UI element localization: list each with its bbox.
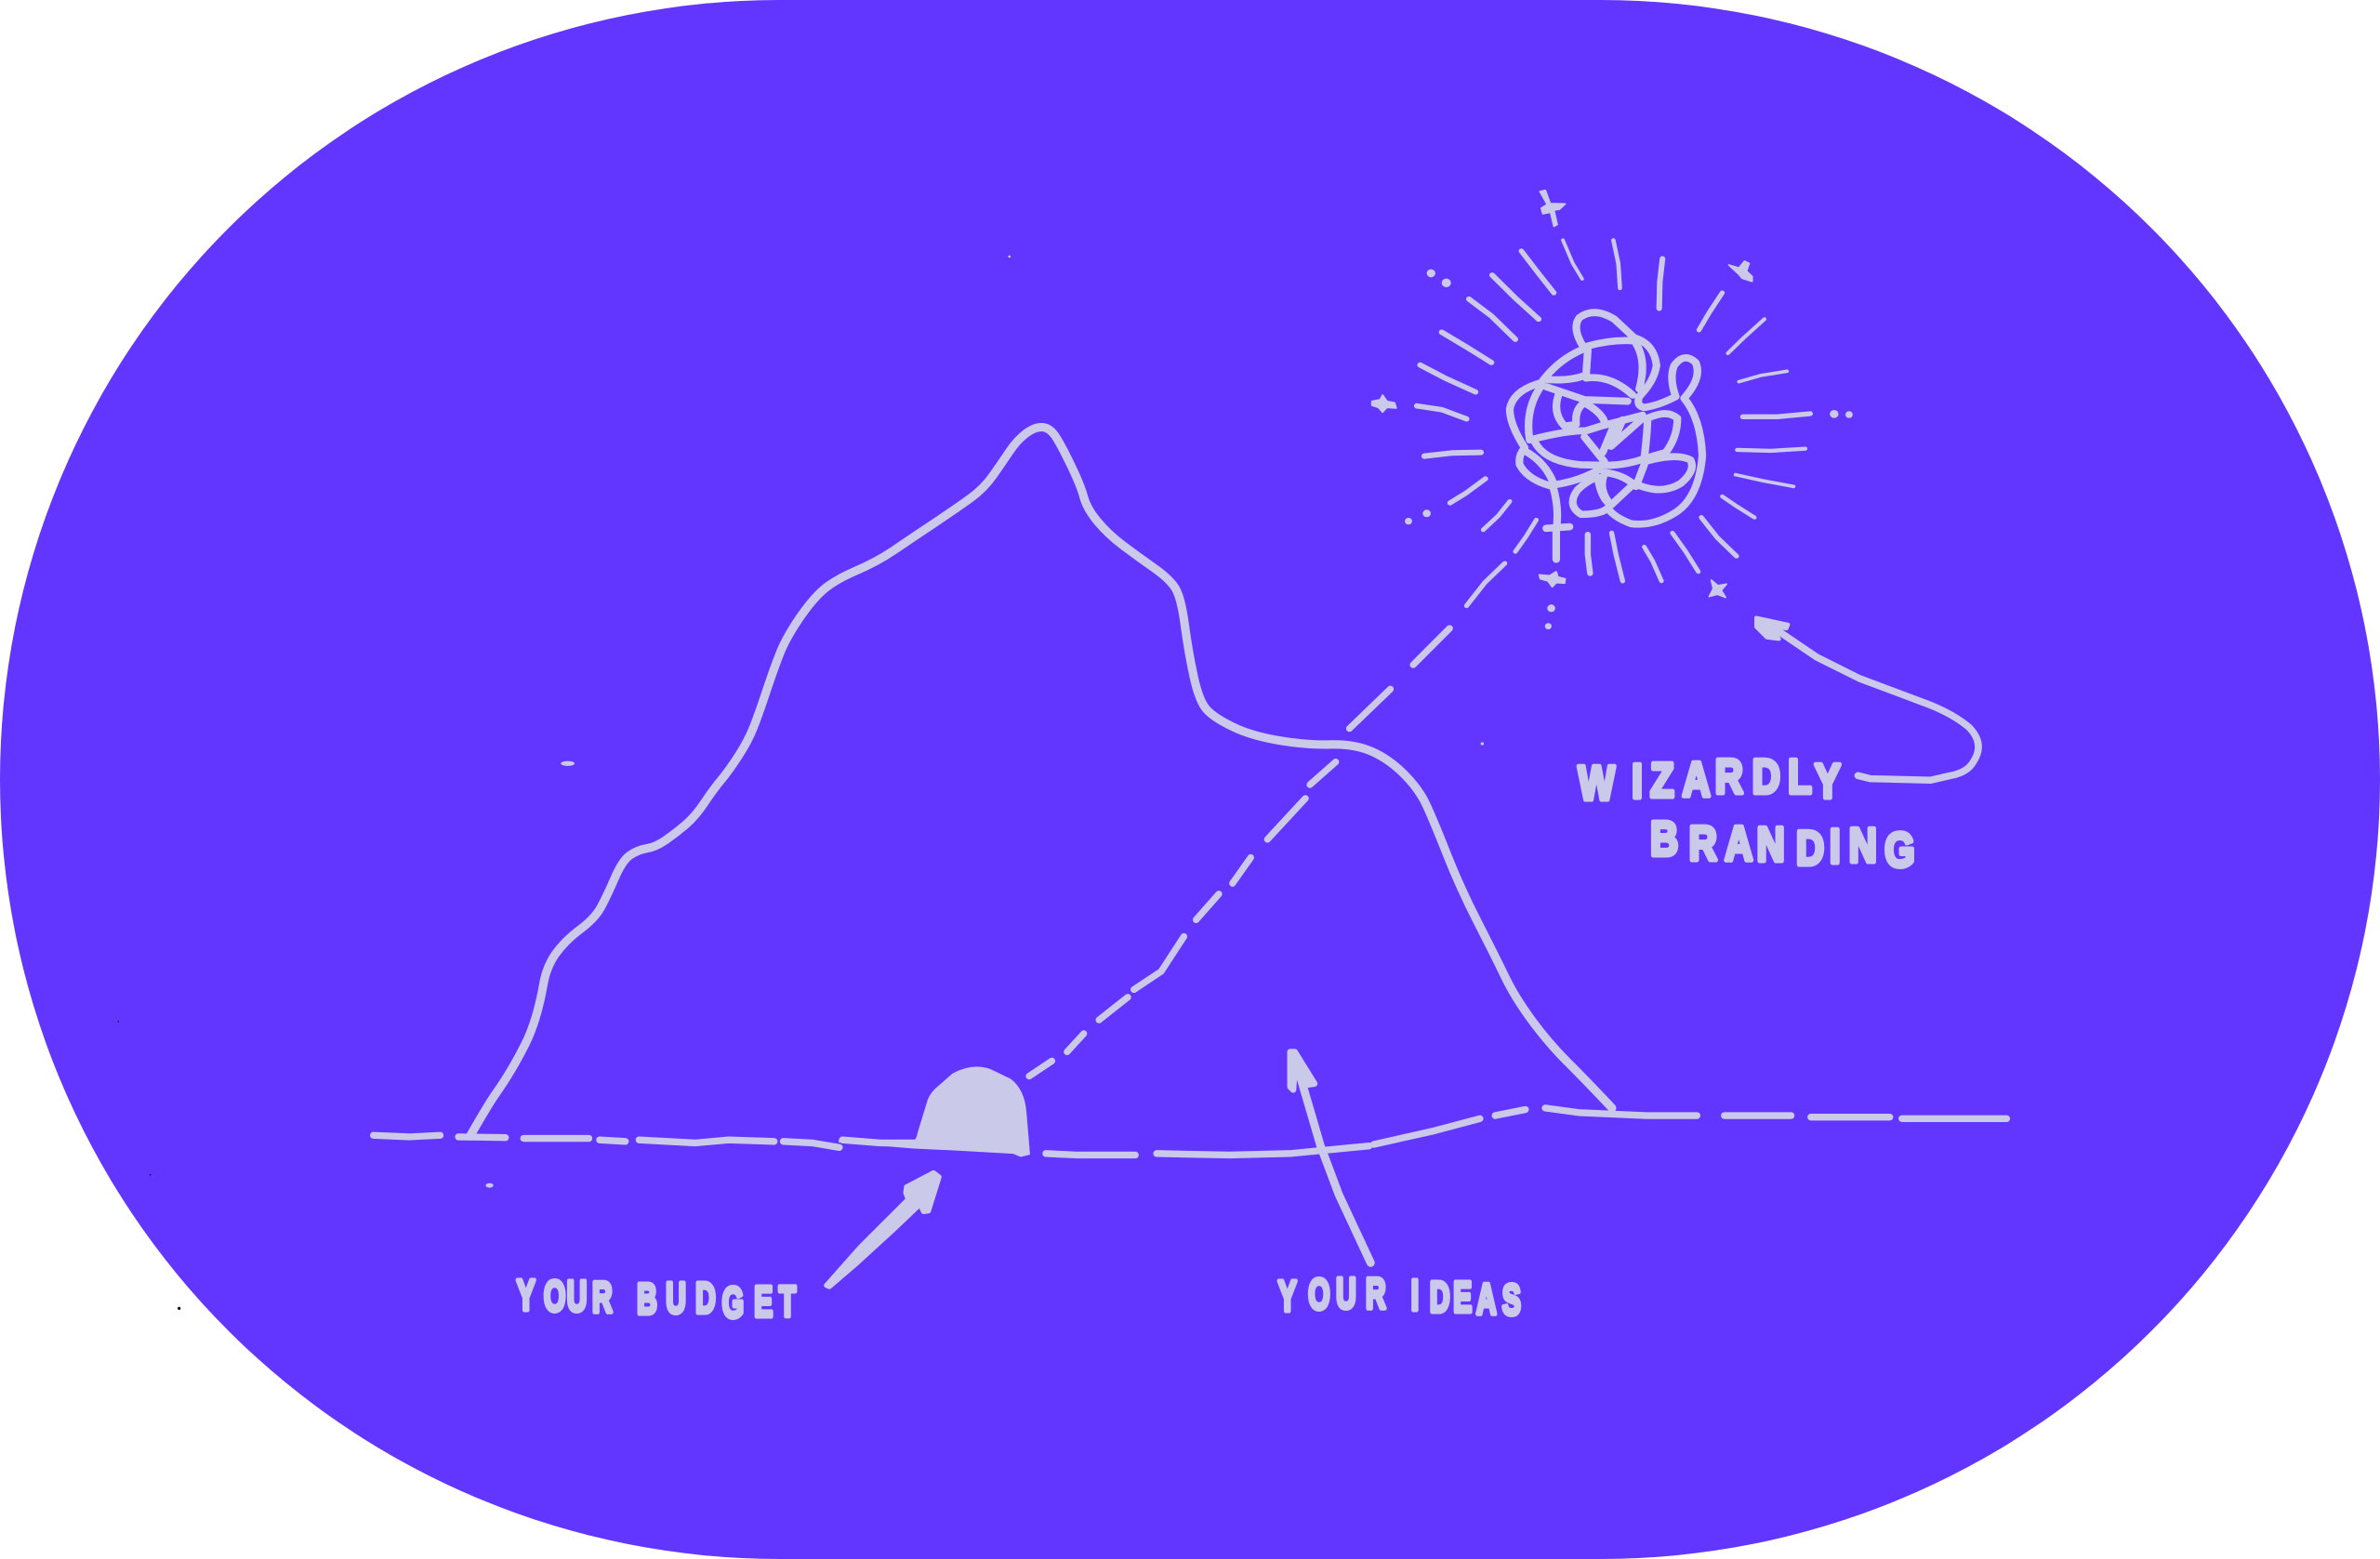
label: wizardly branding: BRANDING [1650,812,1915,877]
label: wizardly branding: WIZARDLY [1579,749,1841,810]
label: your budget: YOUR BUDGET [517,1273,796,1328]
small specks [118,256,1484,1310]
label: your ideas: YOUR IDEAS [1278,1271,1521,1325]
sparkle dots [1405,270,1853,629]
budget hill: small filled mound [840,1067,1029,1156]
label: wizardly branding [1579,749,1915,877]
scribble ball [1510,312,1702,560]
dashed ground line [374,1108,2006,1155]
arrow: your ideas [1290,1051,1370,1262]
sunburst rays [1417,240,1810,606]
dashed trajectory line to the wizard scribble [1029,628,1449,1077]
sparkle stars [1372,191,1752,598]
arrow: your budget [826,1173,939,1287]
wizard scribble with sparkle rays [1372,191,1853,629]
mountain outline: your ideas [470,428,1612,1135]
arrow: wizardly branding curve [1756,618,1978,780]
